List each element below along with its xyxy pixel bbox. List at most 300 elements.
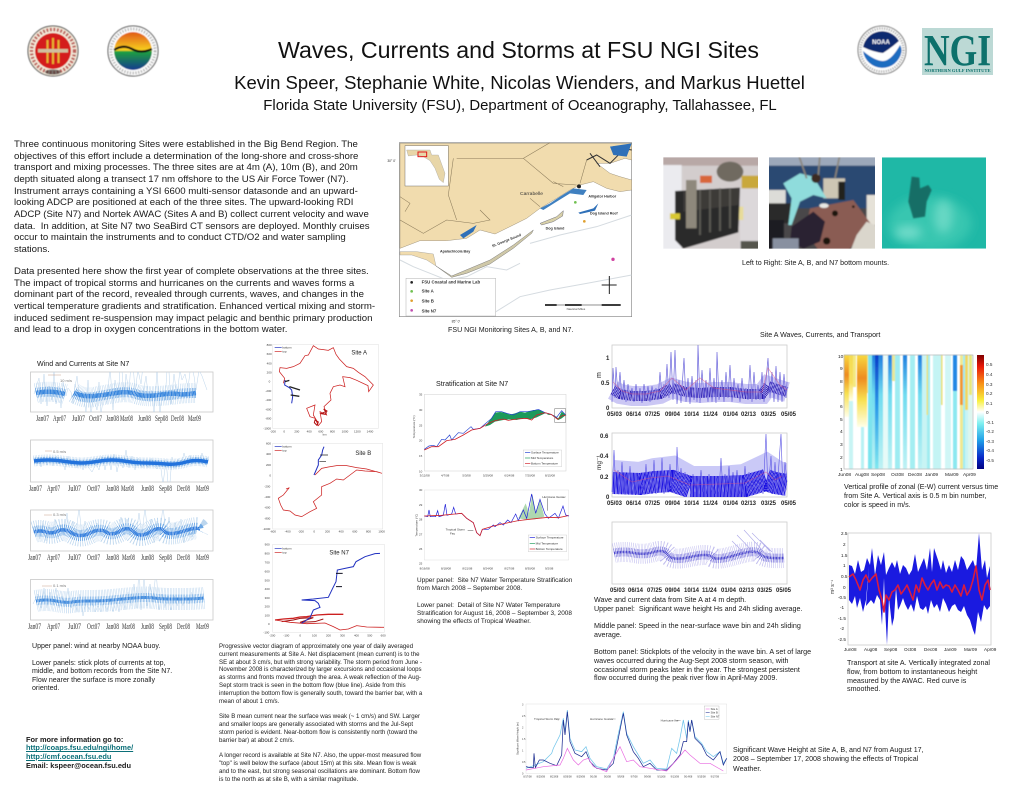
chart: significant wave height at three sites: 9/17/08 — [711, 775, 720, 778]
colorbar: 0.3 — [986, 382, 993, 387]
heading: Site A waves: Site A Waves, Currents, and Transport — [760, 331, 880, 339]
chart: progressive vector diagram Site B: -600 — [264, 506, 271, 510]
logo: NOAA: NOAA — [872, 40, 890, 46]
chart: significant wave height at three sites: 9/14/08 — [684, 775, 693, 778]
chart: significant wave height: 03/25 — [761, 412, 777, 418]
chart: progressive vector diagram Site N7 — [263, 542, 386, 637]
colorbar: -0.1 — [986, 420, 994, 425]
chart: progressive vector diagram Site N7: 900 — [265, 542, 270, 546]
chart: significant wave height: 09/04 — [665, 412, 681, 418]
chart: wave-bin stick plot: 02/13 — [739, 588, 755, 594]
chart: stratification full record: 35 — [419, 393, 423, 397]
chart: transport time series — [830, 531, 997, 652]
chart: stratification full record: 4/7/08 — [441, 474, 450, 478]
chart: wave-bin stick plot: 05/05 — [776, 588, 792, 594]
chart: progressive vector diagram Site N7: 400 — [354, 633, 359, 637]
map labels: Dog Island Reef — [590, 212, 618, 216]
chart: stratification detail: 25 — [419, 562, 423, 566]
chart: stratification detail: Hurricane Gustav — [542, 495, 566, 499]
chart: stratification full record: Surface Temperature — [531, 451, 559, 455]
chart: vertical current profile heatmap: Aug08 — [855, 472, 869, 478]
chart: wave-bin stick plot: 07/25 — [647, 588, 663, 594]
chart: stratification detail: 8/27/08 — [504, 566, 515, 570]
text block: introduction: Three continuous monitoring Sites were established in the Big Bend Region. The objectives of this effort include a determination of the long-shore and cross-shore transport and mixing processes. The three sites are at 4m (A), 10m (B), and 20m depth situated along a transect 17 nm offshore to the US Air Force Tower (N7). Instrument arrays containing a YSI 6600 multi-sensor datasonde and an upward- looking ADCP are positioned at each of the three sites. The upward-looking RDI ADCP (Site N7) and Nortek AWAC (Sites A and B) collect current velocity and wave data. In addition, at Site N7 two SeaBird CT sensors are deployed. Monthly cruises occur to maintain the instruments and to conduct CTD/O2 and water sampling stations. — [14, 139, 370, 255]
chart: progressive vector diagram Site A: 1400 — [367, 429, 374, 433]
caption: progressive vector diagrams: Progressive vector diagram of approximately one year of daily averaged current measurements at Site A. Net displacement (mean current) is to the SE at about 3 cm/s, but with strong variability. The storm period from June - November 2008 is characterized by larger excursions and occasional loops as storms and fronts moved through the area. A weak reflection of the Aug- Sept storm track is seen in the bottom flow (blue line). Aside from this interruption the bottom flow is generally south, toward the barrier bar, with a mean of about 1 cm/s. Site B mean current near the surface was weak (~ 1 cm/s) and SW. Larger and smaller loops are generally associated with storms and the Jul-Sept storm period is evident. Near-bottom flow is consistently north (toward the barrier bar) at about 2 cm/s. A longer record is available at Site N7. Also, the upper-most measured flow "top" is well below the surface (about 15m) at this site. Mean flow is weak and to the east, but strong seasonal oscillations are dominant. Bottom flow is to the north as at site B, with a similar magnitude. — [219, 643, 422, 783]
chart: significant wave height at three sites: 2.5 — [522, 715, 526, 718]
chart: progressive vector diagram Site A: 200 — [267, 371, 272, 375]
chart: progressive vector diagram Site N7: 100 — [312, 633, 317, 637]
chart: progressive vector diagram Site A: 1200 — [354, 429, 361, 433]
chart: progressive vector diagram Site N7: 200 — [265, 605, 270, 609]
chart: progressive vector diagram Site A: top — [282, 350, 287, 354]
colorbar: 0.4 — [986, 372, 993, 377]
chart: wave-bin stick plot: 09/04 — [665, 588, 681, 594]
chart: significant wave height at three sites: 9/11/08 — [657, 775, 666, 778]
chart: progressive vector diagram Site A: -600 — [265, 407, 272, 411]
chart: stratification detail: 8/24/08 — [483, 566, 493, 570]
chart: significant wave height at three sites: 1.5 — [522, 738, 526, 741]
chart: progressive vector diagram Site B: -600 — [270, 530, 276, 534]
chart: stratification detail: 29 — [419, 503, 423, 507]
chart: stratification full record: 20 — [419, 439, 423, 443]
logo: NOAA — [858, 26, 906, 74]
chart: progressive vector diagram Site N7: 800 — [265, 552, 270, 556]
chart: progressive vector diagram Site A: -400 — [265, 398, 272, 402]
panel: top currents: Jul07 — [68, 484, 81, 493]
photo: Site N7 bottom mount — [882, 157, 986, 250]
chart: vertical current profile heatmap: Jun08 — [838, 472, 851, 478]
chart: significant wave height at three sites: Hurricane Ike — [661, 718, 679, 722]
chart: progressive vector diagram Site N7: 500 — [367, 633, 373, 637]
chart: significant wave height at three sites: Significant Wave Height (m) — [515, 722, 519, 755]
panel: top currents: Dec08 — [177, 484, 190, 493]
panel: middle currents: Jan08 — [106, 553, 119, 562]
panel: wind at buoy: Mar08 — [120, 414, 133, 423]
colorbar: -0.2 — [986, 429, 994, 434]
chart: stratification full record: 3/12/08 — [420, 474, 430, 478]
chart: progressive vector diagram Site N7: 700 — [265, 561, 270, 565]
chart: stratification full record: 30 — [419, 408, 423, 412]
panel: middle currents — [28, 505, 213, 562]
chart: significant wave height at three sites: 9/3/08 — [604, 775, 612, 778]
chart: significant wave height at three sites: Tropical Storm Fay — [534, 717, 560, 721]
chart: progressive vector diagram Site N7: 0 — [299, 633, 301, 637]
chart: progressive vector diagram Site N7: top — [282, 550, 287, 554]
chart: wave-bin stick plot — [610, 522, 792, 594]
chart: stratification detail: 8/16/08 — [420, 566, 430, 570]
chart: near-surface speed: 01/04 — [723, 501, 739, 507]
chart: wave-bin stick plot: 11/24 — [702, 588, 717, 594]
chart: near-surface speed: 02/13 — [741, 501, 757, 507]
chart: progressive vector diagram Site A: 800 — [267, 343, 272, 347]
chart: progressive vector diagram Site B: 400 — [339, 530, 344, 534]
chart: significant wave height at three sites: 9/5/08 — [617, 775, 625, 778]
chart: stratification full record: 7/20/08 — [525, 474, 535, 478]
chart: progressive vector diagram Site N7: 600 — [381, 633, 386, 637]
chart: progressive vector diagram Site A: Site A — [351, 350, 367, 356]
caption: significant wave height: Significant Wave Height at Site A, B, and N7 from August 17, 2008 – September 17, 2008 showing the effects of Tropical Weather. — [733, 746, 924, 772]
chart: progressive vector diagram Site N7: -100 — [263, 630, 270, 634]
chart: near-surface speed: 05/05 — [781, 501, 797, 507]
panel: middle currents: Apr07 — [47, 553, 60, 562]
chart: significant wave height at three sites: 3 — [522, 703, 524, 706]
chart: stratification full record — [412, 393, 566, 478]
panel: wind at buoy: Dec08 — [171, 414, 184, 423]
map labels: Alligator Harbor — [588, 194, 617, 198]
colorbar: 0.5 — [986, 362, 993, 367]
chart: significant wave height at three sites: 9/7/08 — [631, 775, 638, 778]
chart: progressive vector diagram Site B: 600 — [266, 441, 271, 445]
chart: significant wave height: 07/25 — [645, 412, 661, 418]
chart: near-surface speed: 0.2 — [600, 475, 609, 481]
chart: vertical current profile heatmap: Mar09 — [945, 472, 959, 478]
chart: stratification full record: 5/3/08 — [462, 474, 471, 478]
chart: progressive vector diagram Site N7: 400 — [265, 587, 270, 591]
chart: stratification full record: 15 — [419, 454, 423, 458]
panel: middle currents: 0.3 m/s — [53, 512, 66, 517]
chart: stratification detail: 28 — [419, 518, 423, 522]
map labels: St. George Sound — [492, 233, 522, 248]
panel: wind at buoy: Apr07 — [53, 414, 66, 423]
panel: wind at buoy — [30, 372, 214, 423]
chart: transport time series: 1 — [843, 563, 846, 568]
chart: significant wave height at three sites: 0.5 — [522, 761, 526, 764]
chart: progressive vector diagram Site B: -200 — [298, 530, 304, 534]
panel: top currents: 0.5 m/s — [53, 449, 66, 454]
chart: significant wave height at three sites: 0 — [522, 773, 524, 776]
caption: map: FSU NGI Monitoring Sites A, B, and N7. — [448, 326, 573, 334]
chart: progressive vector diagram Site A: -200 — [265, 389, 272, 393]
chart: vertical current profile heatmap: 10 — [838, 354, 844, 360]
chart: progressive vector diagram Site N7: 200 — [326, 633, 331, 637]
chart: progressive vector diagram Site A: 1000 — [342, 429, 349, 433]
chart: transport time series: 2.5 — [841, 531, 848, 536]
chart: significant wave height: 11/24 — [703, 412, 718, 418]
colorbar: -0.3 — [986, 439, 994, 444]
chart: significant wave height at three sites: Site N7 — [711, 714, 720, 718]
chart: stratification full record: 5/29/08 — [483, 474, 493, 478]
chart: transport time series: 0 — [843, 585, 846, 590]
chart: transport time series: Mar09 — [964, 647, 977, 652]
chart: significant wave height at three sites: Hurricane Gustav — [590, 717, 614, 721]
chart: stratification detail: 8/18/08 — [441, 566, 451, 570]
chart: significant wave height at three sites: Site B — [711, 711, 718, 715]
chart: transport time series: Aug08 — [864, 647, 878, 652]
chart: vertical current profile heatmap: Sep08 — [871, 472, 885, 478]
chart: transport time series: 0.5 — [841, 574, 848, 579]
panel: bottom currents: Sep08 — [159, 622, 172, 631]
chart: progressive vector diagram Site N7: 300 — [340, 633, 345, 637]
panel: bottom currents — [28, 579, 214, 631]
heading: wind and currents: Wind and Currents at Site N7 — [37, 360, 129, 368]
chart: progressive vector diagram Site B: -800 — [264, 516, 271, 520]
panel: bottom currents: Mar08 — [122, 622, 135, 631]
chart: stratification detail — [414, 488, 569, 570]
contact information: For more information go to: http://coaps.fsu.edu/ngi/home/ http://cmf.ocean.fsu.edu Email: kspeer@ocean.fsu.edu — [26, 734, 133, 770]
chart: progressive vector diagram Site B — [263, 441, 385, 534]
panel: wind at buoy: Oct07 — [89, 414, 102, 423]
chart: progressive vector diagram Site B: 0 — [269, 474, 271, 478]
chart: wind and currents stick plots — [28, 348, 213, 631]
chart: near-surface speed: 0 — [606, 495, 610, 501]
chart: stratification detail: 26 — [419, 547, 423, 551]
panel: bottom currents: Jul07 — [68, 622, 81, 631]
chart: progressive vector diagram Site N7: 500 — [265, 578, 270, 582]
chart: transport time series: m³ s⁻¹ — [830, 580, 836, 594]
chart: vertical current profile heatmap: 7 — [840, 391, 843, 397]
panel: top currents: Mar08 — [121, 484, 134, 493]
chart: stratification full record: Temperature (°C) — [412, 415, 416, 438]
colorbar: -0.4 — [986, 448, 994, 453]
panel: top currents: Mar09 — [196, 484, 209, 493]
chart: progressive vector diagram Site A: 400 — [267, 361, 272, 365]
chart: progressive vector diagram Site B: 200 — [266, 463, 271, 467]
chart: significant wave height: 05/05 — [781, 412, 797, 418]
caption: wind and currents: Upper panel: wind at nearby NOAA buoy. Lower panels: stick plots of currents at top, middle, and bottom records from the Site N7. Flow nearer the surface is more zonally oriented. — [32, 643, 172, 692]
logo: Northern Gulf Institute: NORTHERN GULF INSTITUTE — [924, 68, 991, 73]
chart: near-surface speed: 11/24 — [703, 501, 718, 507]
colorbar: 0 — [986, 410, 989, 415]
chart: significant wave height at three sites: 9/9/08 — [644, 775, 652, 778]
chart: wave-bin stick plot: 06/14 — [628, 588, 644, 594]
chart: significant wave height at three sites: 8/20/08 — [537, 775, 546, 778]
chart: stratification full record: 25 — [419, 423, 423, 427]
chart: stratification full record: 6/24/08 — [504, 474, 515, 478]
chart: near-surface speed: 05/03 — [607, 501, 623, 507]
panel: middle currents: Jan07 — [28, 553, 41, 562]
authors: Kevin Speer, Stephanie White, Nicolas Wienders, and Markus Huettel — [234, 72, 805, 93]
chart: near-surface speed: 09/04 — [665, 501, 681, 507]
chart: stratification detail: 9/2/08 — [545, 566, 554, 570]
chart: near-surface speed: 03/25 — [761, 501, 777, 507]
panel: top currents: Apr07 — [47, 484, 60, 493]
chart: vertical current profile heatmap: 5 — [840, 417, 843, 423]
text block: data summary: Data presented here show the first year of complete observations at the three sites. The impact of tropical storms and hurricanes on the currents and waves forms a dominant part of the record, revealed through currents, waves, and changes in the vertical temperature gradients and stratification. Enhanced vertical mixing and storm- induced sediment re-suspension may impact pelagic and benthic primary production and lead to a drop in oxygen concentrations in the bottom water. — [14, 266, 375, 335]
chart: progressive vector diagram Site B: Site B — [355, 451, 371, 457]
chart: vertical current profile heatmap: Dec08 — [908, 472, 922, 478]
panel: bottom currents: Jan08 — [106, 622, 119, 631]
colorbar: 0.1 — [986, 401, 993, 406]
map labels: Dog Island — [546, 226, 564, 230]
panel: middle currents: Jun08 — [141, 553, 154, 562]
chart: significant wave height — [596, 345, 797, 418]
chart: transport time series: -1 — [840, 605, 845, 610]
heading: stratification: Stratification at Site N7 — [436, 380, 508, 388]
chart: vertical current profile heatmap: 4 — [840, 429, 843, 435]
map legend — [406, 278, 496, 316]
caption: vertical profile: Vertical profile of zonal (E-W) current versus time from Site A. Vertical axis is 0.5 m bin number, color is speed in m/s. — [844, 483, 998, 509]
chart: vertical current profile heatmap: Oct08 — [891, 472, 904, 478]
chart: progressive vector diagram Site B: 200 — [325, 530, 330, 534]
chart: stratification detail: Bottom Temperature — [536, 547, 563, 551]
chart: vertical current profile heatmap: 9 — [840, 366, 843, 372]
chart: near-surface speed: 0.6 — [600, 434, 609, 440]
chart: wave-bin stick plot: 05/03 — [610, 588, 626, 594]
chart: progressive vector diagram Site N7: 100 — [265, 613, 270, 617]
chart: significant wave height at three sites: 8/23/08 — [550, 775, 559, 778]
chart: stratification detail: Tropical Storm — [446, 527, 465, 531]
panel: wind at buoy: Jun08 — [138, 414, 151, 423]
chart: significant wave height: 0 — [606, 406, 610, 412]
chart: progressive vector diagram Site B: bottom — [282, 445, 292, 449]
chart: progressive vector diagram Site N7: 300 — [265, 596, 270, 600]
chart: transport time series: 1.5 — [841, 553, 848, 558]
chart: vertical current profile heatmap — [838, 354, 994, 478]
panel: top currents: Jan08 — [106, 484, 119, 493]
chart: transport time series: Apr09 — [984, 647, 997, 652]
panel: top currents: Jun08 — [141, 484, 154, 493]
chart: progressive vector diagram Site N7: 600 — [265, 569, 270, 573]
chart: transport time series: Jun08 — [844, 647, 857, 652]
chart: progressive vector diagram Site A: -200 — [270, 429, 276, 433]
panel: wind at buoy: Sep08 — [155, 414, 168, 423]
chart: stratification detail: Fay — [450, 532, 455, 536]
chart: transport time series: -2.5 — [838, 637, 846, 642]
chart: significant wave height: 01/04 — [723, 412, 739, 418]
chart: progressive vector diagram Site B: -400 — [285, 530, 291, 534]
colorbar — [977, 355, 994, 469]
chart: stratification detail: 30 — [419, 488, 423, 492]
chart: progressive vector diagram Site A: 0 — [269, 380, 271, 384]
chart: progressive vector diagram Site B: top — [282, 449, 287, 453]
map labels: 85° 0' — [452, 319, 460, 323]
map labels — [387, 159, 618, 323]
panel: wind at buoy: Mar09 — [188, 414, 201, 423]
chart: progressive vector diagram Site B: 600 — [352, 530, 358, 534]
chart: progressive vector diagram Site A: 200 — [294, 429, 300, 433]
chart: progressive vector diagram Site N7: -100 — [283, 633, 290, 637]
chart: stratification detail: 27 — [419, 532, 423, 536]
map inset: Florida — [405, 146, 448, 186]
map labels: 30° 0' — [387, 159, 396, 163]
chart: stratification detail: 8/21/08 — [462, 566, 473, 570]
colorbar: -0.5 — [986, 458, 994, 463]
panel: top currents: Oct07 — [87, 484, 100, 493]
panel: wind at buoy: Jan07 — [36, 414, 49, 423]
chart: near-surface speed — [596, 433, 797, 507]
panel: bottom currents: Mar09 — [196, 622, 209, 631]
chart: progressive vector diagram Site A: 400 — [307, 429, 312, 433]
map labels: Apalachicola Bay — [440, 249, 471, 253]
panel: bottom currents: Apr07 — [47, 622, 60, 631]
chart: transport time series: -2 — [840, 626, 845, 631]
chart: significant wave height: 02/13 — [741, 412, 757, 418]
panel: top currents: Sep08 — [159, 484, 172, 493]
chart: vertical current profile heatmap: 6 — [840, 404, 843, 410]
chart: progressive vector diagram Site A: -800 — [265, 417, 272, 421]
chart: wave-bin stick plot: 03/25 — [757, 588, 773, 594]
map: monitoring sites — [387, 143, 632, 323]
chart: vertical current profile heatmap: 2 — [840, 455, 843, 461]
chart: progressive vector diagram Site A: -1000 — [263, 426, 271, 430]
chart: progressive vector diagram Site N7: Site N7 — [329, 550, 350, 556]
chart: stratification full record: 10 — [419, 469, 423, 473]
chart: progressive vector diagram Site B: -400 — [264, 495, 271, 499]
panel: top currents: Jan07 — [29, 484, 42, 493]
panel: wind at buoy: Jul07 — [72, 414, 85, 423]
chart: significant wave height at three sites: 8/17/08 — [523, 775, 532, 778]
chart: progressive vector diagram Site A: bottom — [282, 346, 292, 350]
panel: middle currents: Dec08 — [177, 553, 190, 562]
chart: progressive vector diagram Site B: 1000 — [378, 530, 385, 534]
logo: Florida State University seal — [28, 26, 78, 76]
logo: Northern Gulf Institute: NGI — [924, 26, 991, 75]
panel: middle currents: Sep08 — [159, 553, 172, 562]
chart: significant wave height: 10/14 — [684, 412, 700, 418]
chart: vertical current profile heatmap: 1 — [840, 467, 843, 473]
chart: near-surface speed: 0.4 — [600, 454, 609, 460]
chart: vertical current profile heatmap: 3 — [840, 442, 843, 448]
title: Waves, Currents and Storms at FSU NGI Sites — [278, 37, 759, 63]
chart: near-surface speed: 06/14 — [626, 501, 642, 507]
chart: stratification full record: Mid Temperature — [531, 456, 554, 460]
map: monitoring sites: Nautical Miles — [567, 307, 586, 311]
panel: wind at buoy: Jan08 — [106, 414, 119, 423]
chart: stratification detail: Temperature (°C) — [414, 514, 418, 537]
caption: stratification: Upper panel: Site N7 Water Temperature Stratification from March 2008 – September 2008. Lower panel: Detail of Site N7 Water Temperature Stratification for August 16, 2008 – September 3, 2008 showing the effects of Tropical Weather. — [417, 577, 572, 625]
chart: stratification full record: Bottom Temperature — [531, 461, 558, 465]
map land — [400, 143, 632, 248]
panel: middle currents: Oct07 — [87, 553, 100, 562]
map legend: FSU Coastal and Marine Lab — [422, 280, 480, 285]
chart: stratification detail: Surface Temperature — [536, 536, 564, 540]
panel: bottom currents: Jan07 — [28, 622, 41, 631]
panel: bottom currents: Oct07 — [87, 622, 100, 631]
chart: transport time series: Jan09 — [944, 647, 957, 652]
chart: progressive vector diagram Site N7: bottom — [282, 546, 292, 550]
chart: progressive vector diagram Site B: 400 — [266, 452, 271, 456]
chart: significant wave height at three sites: 8/29/08 — [577, 775, 586, 778]
chart: significant wave height at three sites: 8/26/08 — [563, 775, 572, 778]
caption: transport: Transport at site A. Vertically integrated zonal flow, from bottom to instantaneous height measured by the AWAC. Red curve is smoothed. — [847, 659, 990, 693]
chart: significant wave height at three sites — [515, 703, 727, 778]
chart: significant wave height: 05/03 — [607, 412, 623, 418]
chart: near-surface speed: mg⁻¹ — [596, 455, 603, 470]
chart: progressive vector diagram Site N7: 0 — [268, 622, 270, 626]
panel: top currents — [29, 440, 213, 495]
chart: wave-bin stick plot: 10/14 — [684, 588, 700, 594]
chart: progressive vector diagram Site B: 800 — [366, 530, 371, 534]
chart: progressive vector diagram Site A — [263, 343, 378, 437]
chart: significant wave height at three sites: 2 — [522, 727, 524, 730]
panel: bottom currents: Dec08 — [177, 622, 190, 631]
logo: FSU Oceanography — [108, 26, 158, 76]
map labels: Carrabelle — [520, 191, 543, 197]
chart: near-surface speed: 07/25 — [645, 501, 661, 507]
chart: significant wave height: 06/14 — [626, 412, 642, 418]
chart: significant wave height at three sites: 9/1/08 — [590, 775, 598, 778]
chart: significant wave height at three sites: 9/13/08 — [671, 775, 680, 778]
chart: progressive vector diagram Site A: 800 — [330, 429, 335, 433]
panel: middle currents: Mar08 — [122, 553, 135, 562]
chart: progressive vector diagram Site B: -1000 — [263, 527, 271, 531]
chart: progressive vector diagram Site N7: -200 — [269, 633, 276, 637]
panel: bottom currents: 0.1 m/s — [53, 583, 66, 588]
map legend: Site A — [422, 289, 435, 294]
panel: middle currents: Jul07 — [68, 553, 81, 562]
map legend: Site B — [422, 299, 434, 304]
chart: significant wave height at three sites: Site A — [711, 707, 718, 711]
chart: significant wave height: 1 — [606, 356, 610, 362]
photo: Site A bottom mount — [660, 154, 762, 252]
chart: transport time series: Oct08 — [904, 647, 917, 652]
chart: transport time series: Sep08 — [884, 647, 898, 652]
chart: stratification full record: 8/15/08 — [545, 474, 555, 478]
chart: vertical current profile heatmap: 8 — [840, 379, 843, 385]
caption: photos: Left to Right: Site A, B, and N7 bottom mounts. — [742, 259, 889, 267]
chart: progressive vector diagram Site B: 0 — [313, 530, 315, 534]
